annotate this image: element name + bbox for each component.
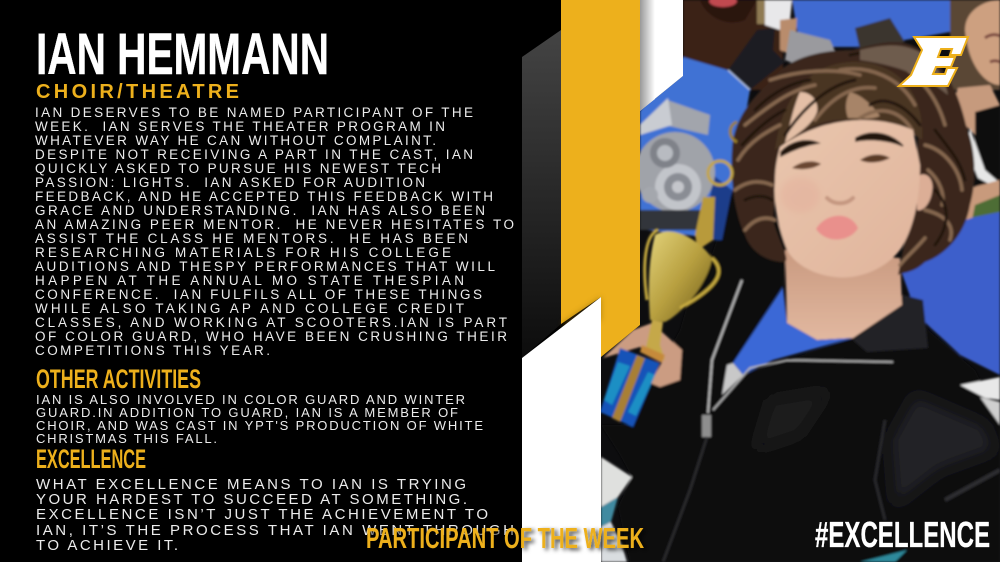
body text: introduction: WEEK. IAN SERVES THE THEATER PROGRAM IN bbox=[35, 119, 445, 134]
cheek tint bbox=[784, 182, 812, 206]
body text: other activities: CHOIR, AND WAS CAST IN YPT'S PRODUCTION OF WHITE bbox=[36, 418, 483, 433]
body text: introduction: PASSION: LIGHTS. IAN ASKED FOR AUDITION bbox=[35, 175, 425, 190]
body text: other activities: GUARD.IN ADDITION TO GUARD, IAN IS A MEMBER OF bbox=[36, 405, 458, 420]
body text: other activities: CHRISTMAS THIS FALL. bbox=[36, 431, 217, 446]
subtitle: activity: CHOIR/THEATRE bbox=[36, 81, 239, 103]
body text: introduction: ASSIST THE CLASS HE MENTORS. HE HAS BEEN bbox=[35, 231, 468, 246]
blue t-shirt bbox=[733, 287, 853, 375]
body text: excellence: EXCELLENCE ISN’T JUST THE ACHIEVEMENT TO bbox=[36, 506, 488, 523]
body text: excellence bbox=[36, 476, 514, 554]
shape: band shadow bbox=[640, 0, 655, 111]
nose bbox=[827, 198, 853, 203]
ear bbox=[917, 174, 933, 210]
body text: introduction: DESPITE NOT RECEIVING A PART IN THE CAST, IAN bbox=[35, 147, 473, 162]
heading: other activities: OTHER ACTIVITIES bbox=[36, 364, 201, 394]
body text: introduction: AUDITIONS AND THESPY PERFORMANCES THAT WILL bbox=[35, 259, 495, 274]
body text: introduction: CONFERENCE. IAN FULFILS ALL OF THESE THINGS bbox=[35, 287, 482, 302]
jacket body bbox=[601, 240, 1000, 562]
body text: other activities bbox=[36, 392, 483, 446]
hand bbox=[603, 323, 682, 387]
footer label: participant of the week: PARTICIPANT OF THE WEEK bbox=[366, 523, 644, 555]
body text: introduction: OF COLOR GUARD, WHO HAVE BEEN CRUSHING THEIR bbox=[35, 329, 507, 344]
body text: introduction: RESEARCHING MATERIALS FOR HIS COLLEGE bbox=[35, 245, 451, 260]
crowd background bbox=[683, 0, 1000, 220]
body text: excellence: YOUR HARDEST TO SUCCEED AT SOMETHING. bbox=[36, 491, 467, 508]
body text: excellence: WHAT EXCELLENCE MEANS TO IAN IS TRYING bbox=[36, 476, 466, 493]
body text: introduction: CLASSES, AND WORKING AT SCOOTERS.IAN IS PART bbox=[35, 315, 507, 330]
body text: introduction: FEEDBACK, AND HE ACCEPTED THIS FEEDBACK WITH bbox=[35, 189, 493, 204]
body text: other activities: IAN IS ALSO INVOLVED IN COLOR GUARD AND WINTER bbox=[36, 392, 465, 407]
body text: introduction bbox=[35, 105, 514, 358]
lips bbox=[816, 216, 858, 240]
shape: white lower band bbox=[522, 297, 601, 562]
photo: student selfie with trophy bbox=[600, 0, 1000, 562]
shape: white top band bbox=[640, 0, 683, 111]
body text: excellence: TO ACHIEVE IT. bbox=[36, 537, 178, 554]
table and teal cloth bbox=[601, 457, 907, 562]
body text: introduction: HAPPEN AT THE ANNUAL MO STATE THESPIAN bbox=[35, 273, 464, 288]
right neighbour blue shirt bbox=[900, 212, 1000, 375]
body text: introduction: COMPETITIONS THIS YEAR. bbox=[35, 343, 270, 358]
jacket collar and highlights bbox=[663, 280, 1000, 562]
trophy bbox=[600, 122, 737, 427]
icon: school E logo bbox=[899, 37, 968, 86]
person behind: blue shirt with watch graphic bbox=[640, 28, 788, 254]
hair bbox=[732, 42, 975, 275]
shape: gold band bbox=[561, 0, 640, 357]
face bbox=[774, 120, 920, 277]
body text: introduction: IAN DESERVES TO BE NAMED PARTICIPANT OF THE bbox=[35, 105, 473, 120]
body text: excellence: IAN, IT’S THE PROCESS THAT IAN WENT THROUGH bbox=[36, 522, 514, 539]
neck bbox=[785, 250, 902, 340]
body text: introduction: AN AMAZING PEER MENTOR. HE NEVER HESITATES TO bbox=[35, 217, 514, 232]
body text: introduction: WHATEVER WAY HE CAN WITHOUT COMPLAINT. bbox=[35, 133, 436, 148]
shape: dark gray band bbox=[522, 30, 561, 358]
eyebrows and eyes bbox=[781, 133, 903, 169]
body text: introduction: GRACE AND UNDERSTANDING. IAN HAS ALSO BEEN bbox=[35, 203, 485, 218]
body text: introduction: WHILE ALSO TAKING AP AND COLLEGE CREDIT bbox=[35, 301, 464, 316]
title: name: IAN HEMMANN bbox=[36, 22, 329, 87]
shape: gold shadow bbox=[561, 297, 601, 330]
body text: introduction: QUICKLY ASKED TO PURSUE HIS NEWEST TECH bbox=[35, 161, 441, 176]
heading: excellence: EXCELLENCE bbox=[36, 444, 146, 474]
